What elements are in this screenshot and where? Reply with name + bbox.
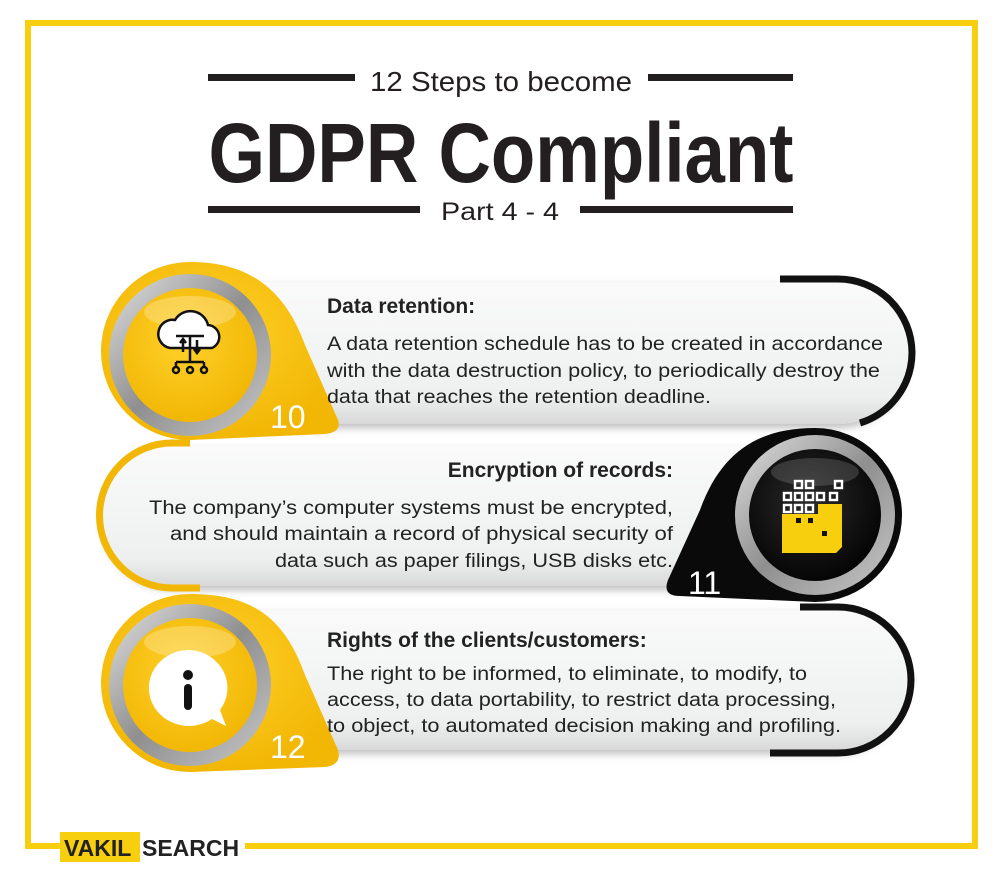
icon: encrypted file bbox=[782, 481, 842, 553]
title block: Part 4 - 4 bbox=[441, 198, 559, 226]
title block bbox=[208, 66, 794, 226]
panel 1: data retention: with the data destruction policy, to periodically destroy the bbox=[326, 361, 880, 382]
panel 2: encryption: data such as paper filings, USB disks etc. bbox=[275, 551, 673, 572]
text 11: Encryption of records: bbox=[448, 459, 673, 482]
panel 2: encryption bbox=[100, 428, 902, 602]
text 10: Data retention: bbox=[327, 295, 475, 318]
yellow badge 12 bbox=[101, 594, 339, 772]
panel 2: encryption: The company’s computer systems must be encrypted, bbox=[149, 498, 673, 519]
panel 3: rights: The right to be informed, to eliminate, to modify, to bbox=[327, 664, 807, 685]
black badge 11 bbox=[666, 428, 902, 602]
panel 3: rights bbox=[101, 594, 911, 772]
panel 2: encryption: and should maintain a record of physical security of bbox=[170, 524, 674, 545]
panel 3: rights: access, to data portability, to restrict data processing, bbox=[327, 690, 836, 711]
panel 2: encryption: 11 bbox=[688, 565, 721, 601]
logo: VAKIL SEARCH bbox=[60, 832, 239, 862]
yellow badge 10 bbox=[101, 262, 339, 440]
panel 1: data retention: 10 bbox=[270, 399, 306, 435]
title block: GDPR Compliant bbox=[208, 106, 794, 200]
panel 1: data retention: data that reaches the retention deadline. bbox=[327, 387, 711, 408]
panel 3: rights: to object, to automated decision making and profiling. bbox=[327, 716, 841, 737]
logo: VAKIL SEARCH: SEARCH bbox=[142, 835, 239, 861]
panel 1: data retention bbox=[101, 262, 912, 440]
panel 3: rights: 12 bbox=[270, 729, 306, 765]
panel 1: data retention: A data retention schedule has to be created in accordance bbox=[327, 334, 883, 355]
icon: cloud network bbox=[158, 311, 219, 373]
title block: 12 Steps to become bbox=[370, 66, 632, 97]
logo: VAKIL SEARCH: VAKIL bbox=[64, 835, 131, 861]
icon: info bubble bbox=[149, 650, 227, 726]
text 12: Rights of the clients/customers: bbox=[327, 629, 647, 652]
